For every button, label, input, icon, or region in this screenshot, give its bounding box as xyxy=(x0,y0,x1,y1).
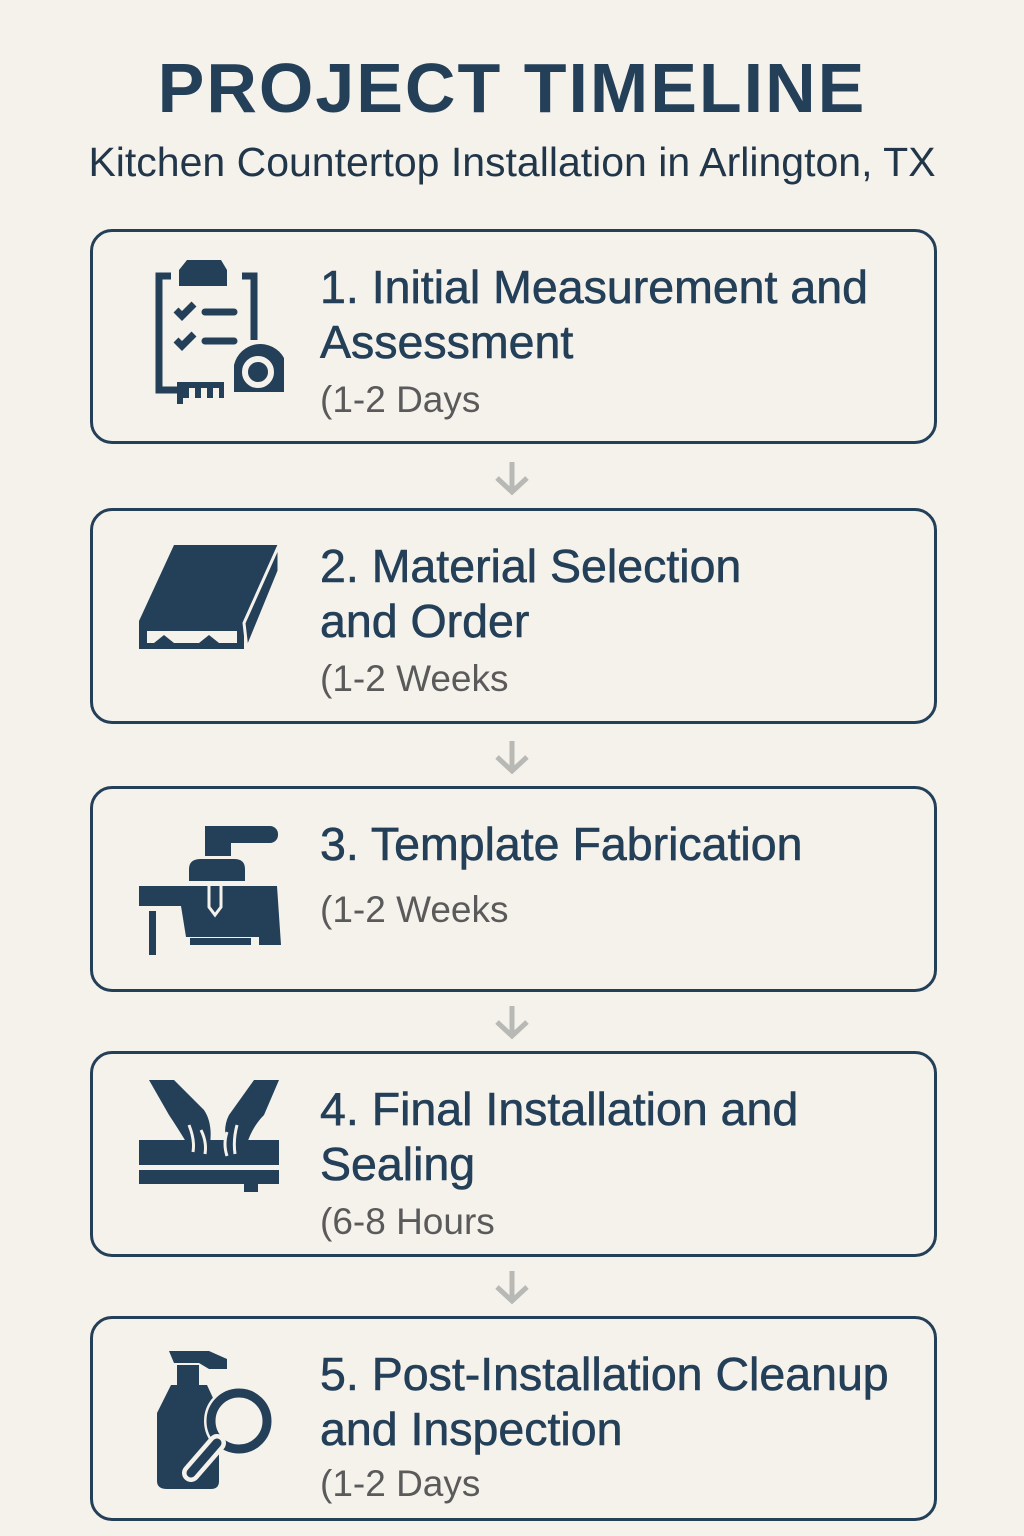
arrow xyxy=(495,462,529,496)
heading: 1. Initial Measurement and xyxy=(320,261,868,313)
duration: (1-2 Days xyxy=(320,379,480,420)
heading: and Order xyxy=(320,595,529,647)
arrow xyxy=(495,1006,529,1040)
heading: and Inspection xyxy=(320,1403,622,1455)
heading xyxy=(320,540,741,647)
icon: clipboard with tape measure xyxy=(156,260,284,404)
heading: 3. Template Fabrication xyxy=(320,818,802,870)
duration: (1-2 Days xyxy=(320,1463,480,1504)
arrow xyxy=(495,741,529,774)
subtitle: Kitchen Countertop Installation in Arlington, TX xyxy=(88,139,936,185)
panel: step 1 xyxy=(90,229,937,444)
heading: 2. Material Selection xyxy=(320,540,741,592)
heading xyxy=(320,261,868,368)
title: PROJECT TIMELINE xyxy=(158,49,866,127)
icon: spray bottle and magnifier xyxy=(157,1351,272,1489)
duration: (1-2 Weeks xyxy=(320,658,508,699)
icon: router fabrication table xyxy=(139,826,281,955)
icon: countertop slab xyxy=(139,545,278,649)
heading: Sealing xyxy=(320,1138,475,1190)
panel: step 5 xyxy=(90,1316,937,1521)
heading xyxy=(320,1083,798,1190)
icon: hands sealing countertop xyxy=(139,1080,279,1192)
heading: Assessment xyxy=(320,316,573,368)
panel: step 3 xyxy=(90,786,937,992)
heading xyxy=(320,1348,889,1455)
duration: (6-8 Hours xyxy=(320,1201,495,1242)
arrow xyxy=(495,1271,529,1304)
heading: 5. Post-Installation Cleanup xyxy=(320,1348,889,1400)
heading: 4. Final Installation and xyxy=(320,1083,798,1135)
panel: step 4 xyxy=(90,1051,937,1257)
panel: step 2 xyxy=(90,508,937,724)
duration: (1-2 Weeks xyxy=(320,889,508,930)
